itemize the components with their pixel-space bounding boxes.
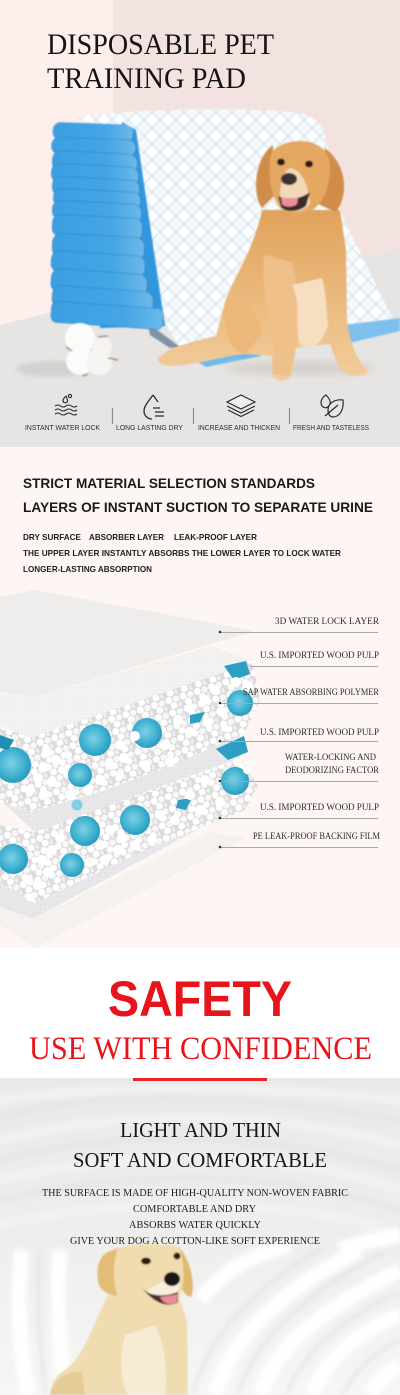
section heading: STRICT MATERIAL SELECTION STANDARDS (23, 475, 315, 491)
left ear (256, 145, 274, 208)
feature labels (25, 423, 369, 432)
title: DISPOSABLE PET (47, 28, 274, 61)
haunch (224, 299, 262, 354)
panel: safety heading (0, 948, 400, 1080)
callout labels: U.S. IMPORTED WOOD PULP (260, 802, 379, 812)
towel texture (0, 1089, 400, 1395)
section heading: LAYERS OF INSTANT SUCTION TO SEPARATE URINE (23, 499, 373, 515)
callout labels: SAP WATER ABSORBING POLYMER (243, 687, 379, 697)
callout labels (243, 616, 380, 841)
feature labels: LONG LASTING DRY (116, 423, 183, 432)
right ear (318, 148, 344, 212)
white beads (23, 677, 253, 901)
bottom film (0, 832, 245, 948)
soft description (42, 1187, 348, 1247)
icon: drop with lines (144, 395, 164, 419)
callout labels: DEODORIZING FACTOR (285, 765, 379, 775)
callout dots (219, 631, 221, 848)
water spheres (0, 661, 253, 877)
soft heading (73, 1118, 327, 1172)
stack of blue folded pads (50, 122, 165, 330)
section description (23, 532, 341, 574)
section description: ABSORBER LAYER (89, 532, 164, 542)
second sheet (0, 646, 250, 738)
feature labels: FRESH AND TASTELESS (293, 423, 369, 432)
head (270, 141, 330, 215)
panel: soft towel surface (0, 1078, 400, 1395)
quilted white pad (72, 110, 400, 367)
section description: LONGER-LASTING ABSORPTION (23, 564, 152, 574)
callout labels: U.S. IMPORTED WOOD PULP (260, 727, 379, 737)
red accent bar (133, 1078, 267, 1081)
feature icons row (25, 394, 369, 432)
section heading (23, 475, 373, 515)
dividers (112, 408, 290, 424)
soft description: COMFORTABLE AND DRY (133, 1203, 256, 1215)
layered pad cross-section (0, 590, 260, 948)
safety title: SAFETY (108, 971, 292, 1027)
front leg (264, 255, 300, 376)
panel: material layers (0, 447, 400, 948)
golden retriever (158, 141, 375, 381)
soft description: GIVE YOUR DOG A COTTON-LIKE SOFT EXPERIENCE (70, 1235, 320, 1247)
callout labels: PE LEAK-PROOF BACKING FILM (253, 831, 380, 841)
body (158, 210, 369, 381)
feature labels: INCREASE AND THICKEN (198, 423, 280, 432)
callout labels: WATER-LOCKING AND (285, 752, 376, 762)
puppy (50, 1244, 193, 1395)
icon: leaves (321, 395, 343, 417)
section description: DRY SURFACE (23, 532, 81, 542)
callout lines (220, 632, 378, 848)
upper bead layer (0, 660, 260, 812)
top sheet (0, 590, 255, 697)
soft heading: LIGHT AND THIN (120, 1118, 281, 1142)
panel: hero product scene (0, 0, 400, 447)
callout labels: U.S. IMPORTED WOOD PULP (260, 650, 379, 660)
icon: stacked layers (227, 395, 255, 416)
lower bead layer (0, 758, 258, 903)
soft heading: SOFT AND COMFORTABLE (73, 1148, 327, 1172)
section description: THE UPPER LAYER INSTANTLY ABSORBS THE LOWER LAYER TO LOCK WATER (23, 548, 341, 558)
cotton boll (16, 323, 118, 377)
chest fluff (292, 278, 328, 347)
feature labels: INSTANT WATER LOCK (25, 423, 100, 432)
icon: water waves (55, 394, 77, 415)
soft description: THE SURFACE IS MADE OF HIGH-QUALITY NON-WOVEN FABRIC (42, 1187, 348, 1199)
lower grid sheet (0, 828, 200, 919)
section description: LEAK-PROOF LAYER (174, 532, 257, 542)
soft description: ABSORBS WATER QUICKLY (129, 1219, 261, 1231)
title: TRAINING PAD (47, 62, 246, 95)
middle grid sheet (4, 734, 240, 832)
title (47, 28, 274, 95)
callout labels: 3D WATER LOCK LAYER (275, 616, 379, 626)
safety subtitle: USE WITH CONFIDENCE (29, 1031, 372, 1067)
